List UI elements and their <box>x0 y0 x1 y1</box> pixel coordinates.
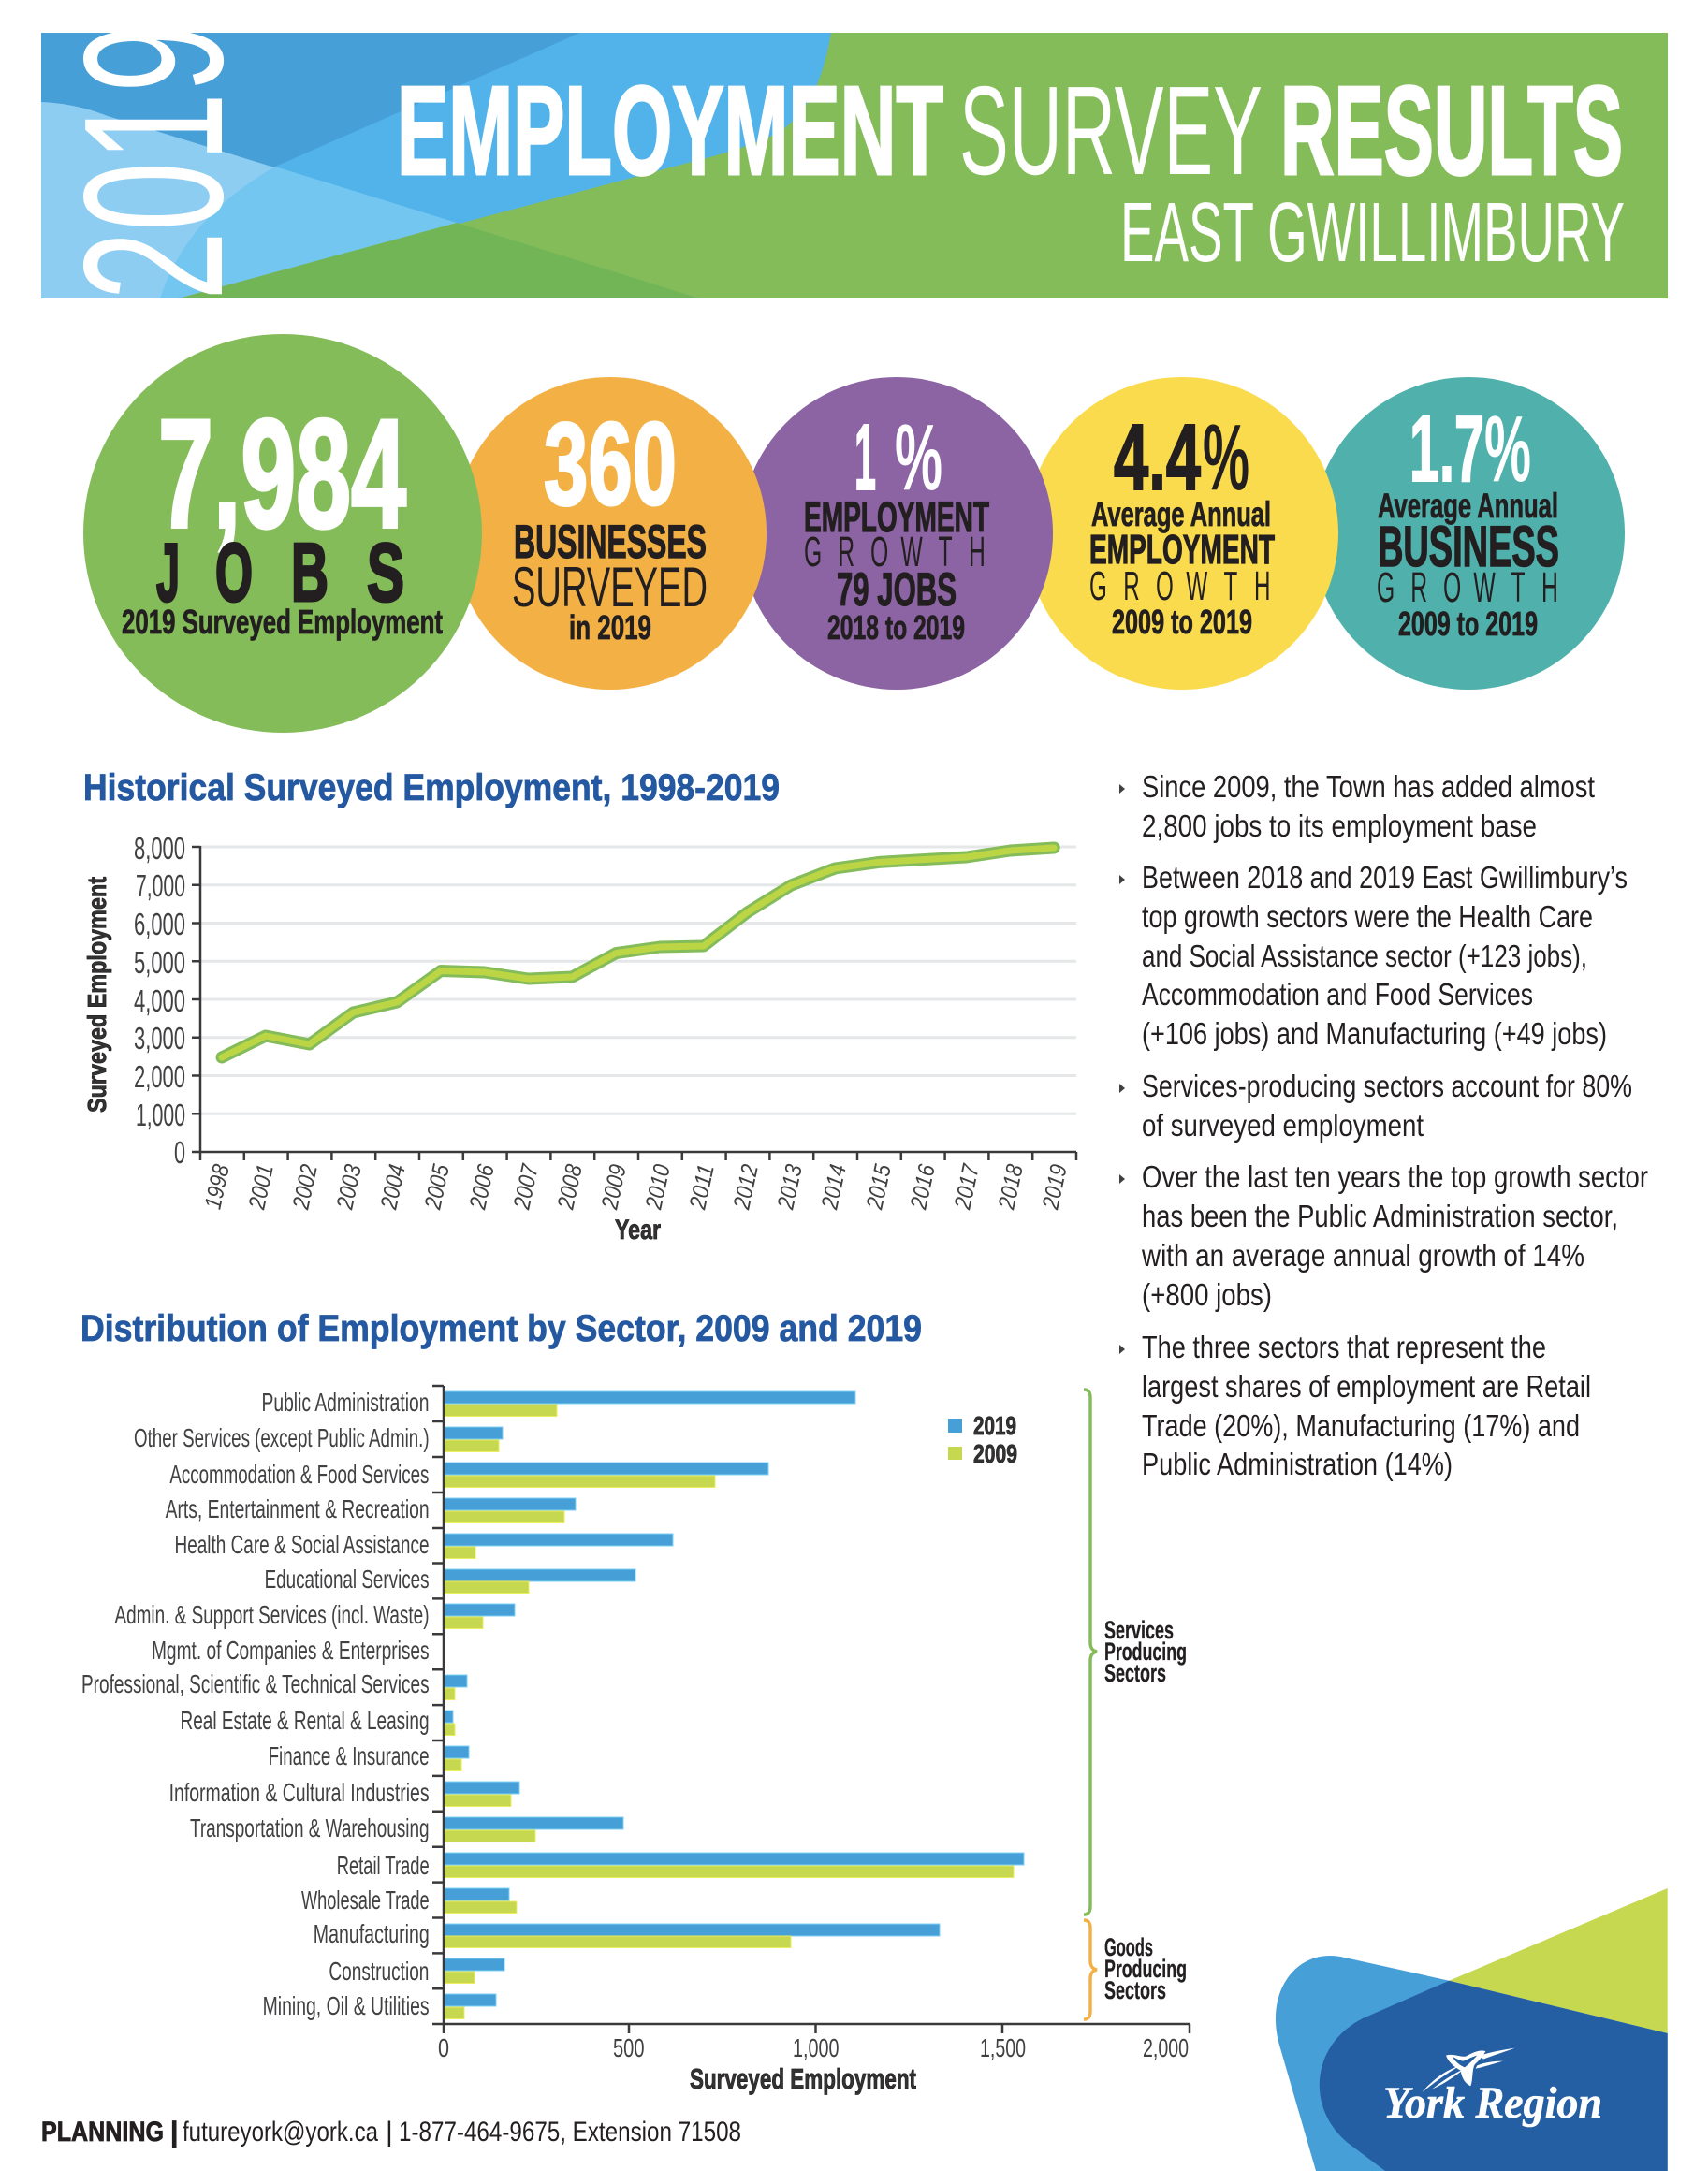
bullet 2: and Social Assistance sector (+123 jobs), <box>1142 939 1587 973</box>
circle: employment growth: EMPLOYMENT <box>804 493 989 541</box>
x axis year labels: 2007 <box>508 1161 544 1213</box>
sector labels: Retail Trade <box>337 1851 430 1880</box>
label: goods producing sectors: Goods <box>1104 1933 1153 1961</box>
York Region logo block <box>1276 1888 1668 2171</box>
bullet 4: (+800 jobs) <box>1142 1277 1272 1312</box>
circle: employment growth: % <box>895 405 942 510</box>
circle: average employment growth: 4.4 <box>1114 405 1201 510</box>
label: services producing sectors: Producing <box>1104 1638 1187 1666</box>
sector labels: Other Services (except Public Admin.) <box>134 1423 430 1452</box>
x axis year labels: 2005 <box>419 1162 455 1213</box>
bullet 2: top growth sectors were the Health Care <box>1142 899 1593 934</box>
x axis year labels: 2012 <box>728 1162 764 1213</box>
legend: 2019 <box>973 1411 1016 1440</box>
circle: businesses surveyed: in 2019 <box>569 608 651 647</box>
sector labels <box>81 1388 430 2020</box>
key findings bullets <box>1119 769 1648 1481</box>
circle: employment growth <box>740 377 1053 690</box>
sector labels: Health Care & Social Assistance <box>174 1530 429 1559</box>
x axis year labels: 2013 <box>772 1162 808 1213</box>
x axis year labels: 2017 <box>949 1161 985 1213</box>
x axis labels: 1,500 <box>980 2033 1026 2062</box>
x axis labels: 2,000 <box>1143 2033 1189 2062</box>
sector labels: Admin. & Support Services (incl. Waste) <box>114 1600 429 1629</box>
x axis labels: 1,000 <box>793 2033 839 2062</box>
brace: goods producing sectors <box>1084 1920 1097 2019</box>
sector labels: Public Administration <box>262 1388 429 1417</box>
x axis labels <box>438 2033 1189 2062</box>
circle: total jobs: 7,984 <box>158 387 406 560</box>
sector labels: Mgmt. of Companies & Enterprises <box>152 1636 430 1665</box>
footer contact line: PLANNING <box>41 2117 164 2148</box>
brace: services producing sectors <box>1084 1390 1097 1915</box>
bullet 4 <box>1119 1159 1648 1312</box>
circle: average employment growth: GROWTH <box>1089 562 1270 609</box>
footer contact line: | <box>386 2117 393 2148</box>
employment line <box>222 848 1054 1057</box>
footer contact line: 1-877-464-9675, Extension 71508 <box>399 2117 741 2148</box>
x axis year labels: 2006 <box>464 1162 500 1213</box>
x axis year labels: 2019 <box>1037 1162 1073 1213</box>
sector labels: Wholesale Trade <box>301 1886 430 1915</box>
x axis year labels: 2004 <box>375 1162 411 1213</box>
circle: total jobs: O <box>215 526 253 619</box>
circle: business growth: BUSINESS <box>1378 515 1559 578</box>
circle: employment growth: 2018 to 2019 <box>827 608 965 647</box>
footer contact line <box>41 2117 741 2148</box>
x axis year labels: 2016 <box>905 1162 941 1213</box>
sector labels: Educational Services <box>265 1565 430 1594</box>
heading: historical employment: Historical Surveyed Employment, 1998-2019 <box>83 767 780 808</box>
y axis labels <box>134 831 185 1170</box>
y axis labels: 2,000 <box>134 1059 185 1094</box>
sector labels: Information & Cultural Industries <box>169 1778 430 1807</box>
y axis labels: 3,000 <box>134 1021 185 1056</box>
y axis and x axis <box>192 846 1076 1160</box>
bullet 3 <box>1119 1069 1632 1143</box>
x axis year labels <box>199 1161 1073 1213</box>
sector labels: Finance & Insurance <box>269 1741 430 1770</box>
bullet 2: Accommodation and Food Services <box>1142 977 1533 1012</box>
circle: average employment growth <box>1026 377 1338 690</box>
x axis year labels: 1998 <box>199 1162 235 1212</box>
y axis title: Surveyed Employment <box>82 877 111 1113</box>
x axis year labels: 2018 <box>993 1162 1029 1213</box>
y axis labels: 0 <box>174 1135 185 1170</box>
circle: businesses surveyed: BUSINESSES <box>514 516 707 568</box>
icon: York Region star <box>1422 2048 1515 2092</box>
bullet 5: largest shares of employment are Retail <box>1142 1369 1591 1404</box>
bullet 1 <box>1119 769 1595 843</box>
label: goods producing sectors: Producing <box>1104 1955 1187 1983</box>
bar chart: employment by sector <box>81 1386 1190 2095</box>
circle: business growth: Average Annual <box>1378 487 1558 525</box>
banner background shapes <box>41 33 1668 298</box>
circle: employment growth: GROWTH <box>804 528 986 575</box>
circle: average employment growth: EMPLOYMENT <box>1089 527 1275 573</box>
x axis year labels: 2015 <box>861 1162 897 1213</box>
line chart: historical surveyed employment <box>82 831 1076 1245</box>
bullet 5: Public Administration (14%) <box>1142 1447 1453 1481</box>
circle: businesses surveyed: SURVEYED <box>512 556 708 619</box>
x axis year labels: 2001 <box>243 1162 279 1213</box>
label: goods producing sectors: Sectors <box>1104 1976 1166 2004</box>
2019 bars <box>445 1391 1024 2006</box>
circle: total jobs: B <box>291 526 329 619</box>
y axis labels: 5,000 <box>134 945 185 980</box>
x axis labels: 0 <box>438 2033 449 2062</box>
x axis title: Surveyed Employment <box>690 2062 916 2095</box>
circle: business growth: 1.7 <box>1409 397 1484 502</box>
y axis labels: 1,000 <box>136 1098 185 1132</box>
sector labels: Construction <box>329 1957 429 1986</box>
circle: total jobs: 2019 Surveyed Employment <box>122 603 443 641</box>
bullet 2 <box>1119 860 1628 1051</box>
circle: average employment growth: % <box>1203 405 1249 510</box>
bullet 2: (+106 jobs) and Manufacturing (+49 jobs) <box>1142 1016 1607 1051</box>
circle: average employment growth: 2009 to 2019 <box>1112 603 1252 641</box>
header banner <box>41 23 1668 300</box>
circle: employment growth: 1 <box>854 405 876 510</box>
bullet 4: with an average annual growth of 14% <box>1141 1238 1584 1273</box>
circle: businesses surveyed <box>454 377 767 690</box>
x axis title: Year <box>615 1215 661 1245</box>
axes <box>432 1386 1190 2033</box>
bullet 1: 2,800 jobs to its employment base <box>1142 808 1537 843</box>
sector labels: Transportation & Warehousing <box>190 1813 430 1842</box>
sector labels: Arts, Entertainment & Recreation <box>166 1494 430 1523</box>
circle: average employment growth: Average Annual <box>1091 495 1271 533</box>
circle: total jobs: J <box>156 526 180 619</box>
circle: business growth: 2009 to 2019 <box>1398 604 1538 643</box>
bullet 5: The three sectors that represent the <box>1142 1330 1546 1364</box>
sector labels: Real Estate & Rental & Leasing <box>180 1706 429 1735</box>
legend <box>948 1411 1017 1468</box>
y axis labels: 7,000 <box>136 868 185 903</box>
y axis labels: 6,000 <box>134 907 185 941</box>
label: services producing sectors <box>1104 1616 1187 1687</box>
y axis labels: 4,000 <box>134 983 185 1018</box>
heading: distribution by sector: Distribution of Employment by Sector, 2009 and 2019 <box>80 1308 922 1349</box>
circle: total jobs: S <box>367 526 404 619</box>
bullet 5 <box>1119 1330 1591 1481</box>
logo shapes <box>1449 1888 1668 2033</box>
label: goods producing sectors <box>1104 1933 1187 2004</box>
bullet 5: Trade (20%), Manufacturing (17%) and <box>1142 1408 1580 1443</box>
x axis labels: 500 <box>613 2033 644 2062</box>
2009 bars <box>445 1405 1014 2019</box>
label: services producing sectors: Sectors <box>1104 1659 1166 1687</box>
circle: businesses surveyed: 360 <box>544 400 677 530</box>
x axis year labels: 2003 <box>331 1162 367 1213</box>
x axis year labels: 2014 <box>816 1162 852 1213</box>
x axis year labels: 2010 <box>640 1162 676 1213</box>
circle: business growth: % <box>1484 397 1531 502</box>
title: EMPLOYMENT <box>397 60 943 201</box>
logo wordmark: York Region <box>1383 2078 1602 2128</box>
y axis labels: 8,000 <box>134 831 185 866</box>
circle: business growth: GROWTH <box>1377 563 1558 611</box>
legend: 2009 <box>973 1439 1017 1468</box>
x axis year labels: 2002 <box>287 1162 323 1213</box>
circle: business growth <box>1312 377 1625 690</box>
stat circles <box>83 334 1625 733</box>
circle: total jobs <box>83 334 482 733</box>
x axis year labels: 2008 <box>552 1162 588 1213</box>
bullet 3: of surveyed employment <box>1142 1108 1424 1143</box>
sector labels: Accommodation & Food Services <box>169 1460 429 1489</box>
bullet 1: Since 2009, the Town has added almost <box>1142 769 1595 804</box>
sector labels: Manufacturing <box>314 1919 430 1948</box>
title: SURVEY <box>959 60 1263 201</box>
sector labels: Professional, Scientific & Technical Services <box>81 1669 430 1698</box>
x axis year labels: 2009 <box>596 1162 632 1213</box>
x axis year labels: 2011 <box>684 1162 720 1213</box>
sector labels: Mining, Oil & Utilities <box>263 1991 430 2020</box>
footer contact line: futureyork@york.ca <box>183 2117 378 2148</box>
footer contact line: | <box>170 2117 178 2148</box>
circle: employment growth: 79 JOBS <box>837 563 957 616</box>
label: services producing sectors: Services <box>1104 1616 1174 1644</box>
